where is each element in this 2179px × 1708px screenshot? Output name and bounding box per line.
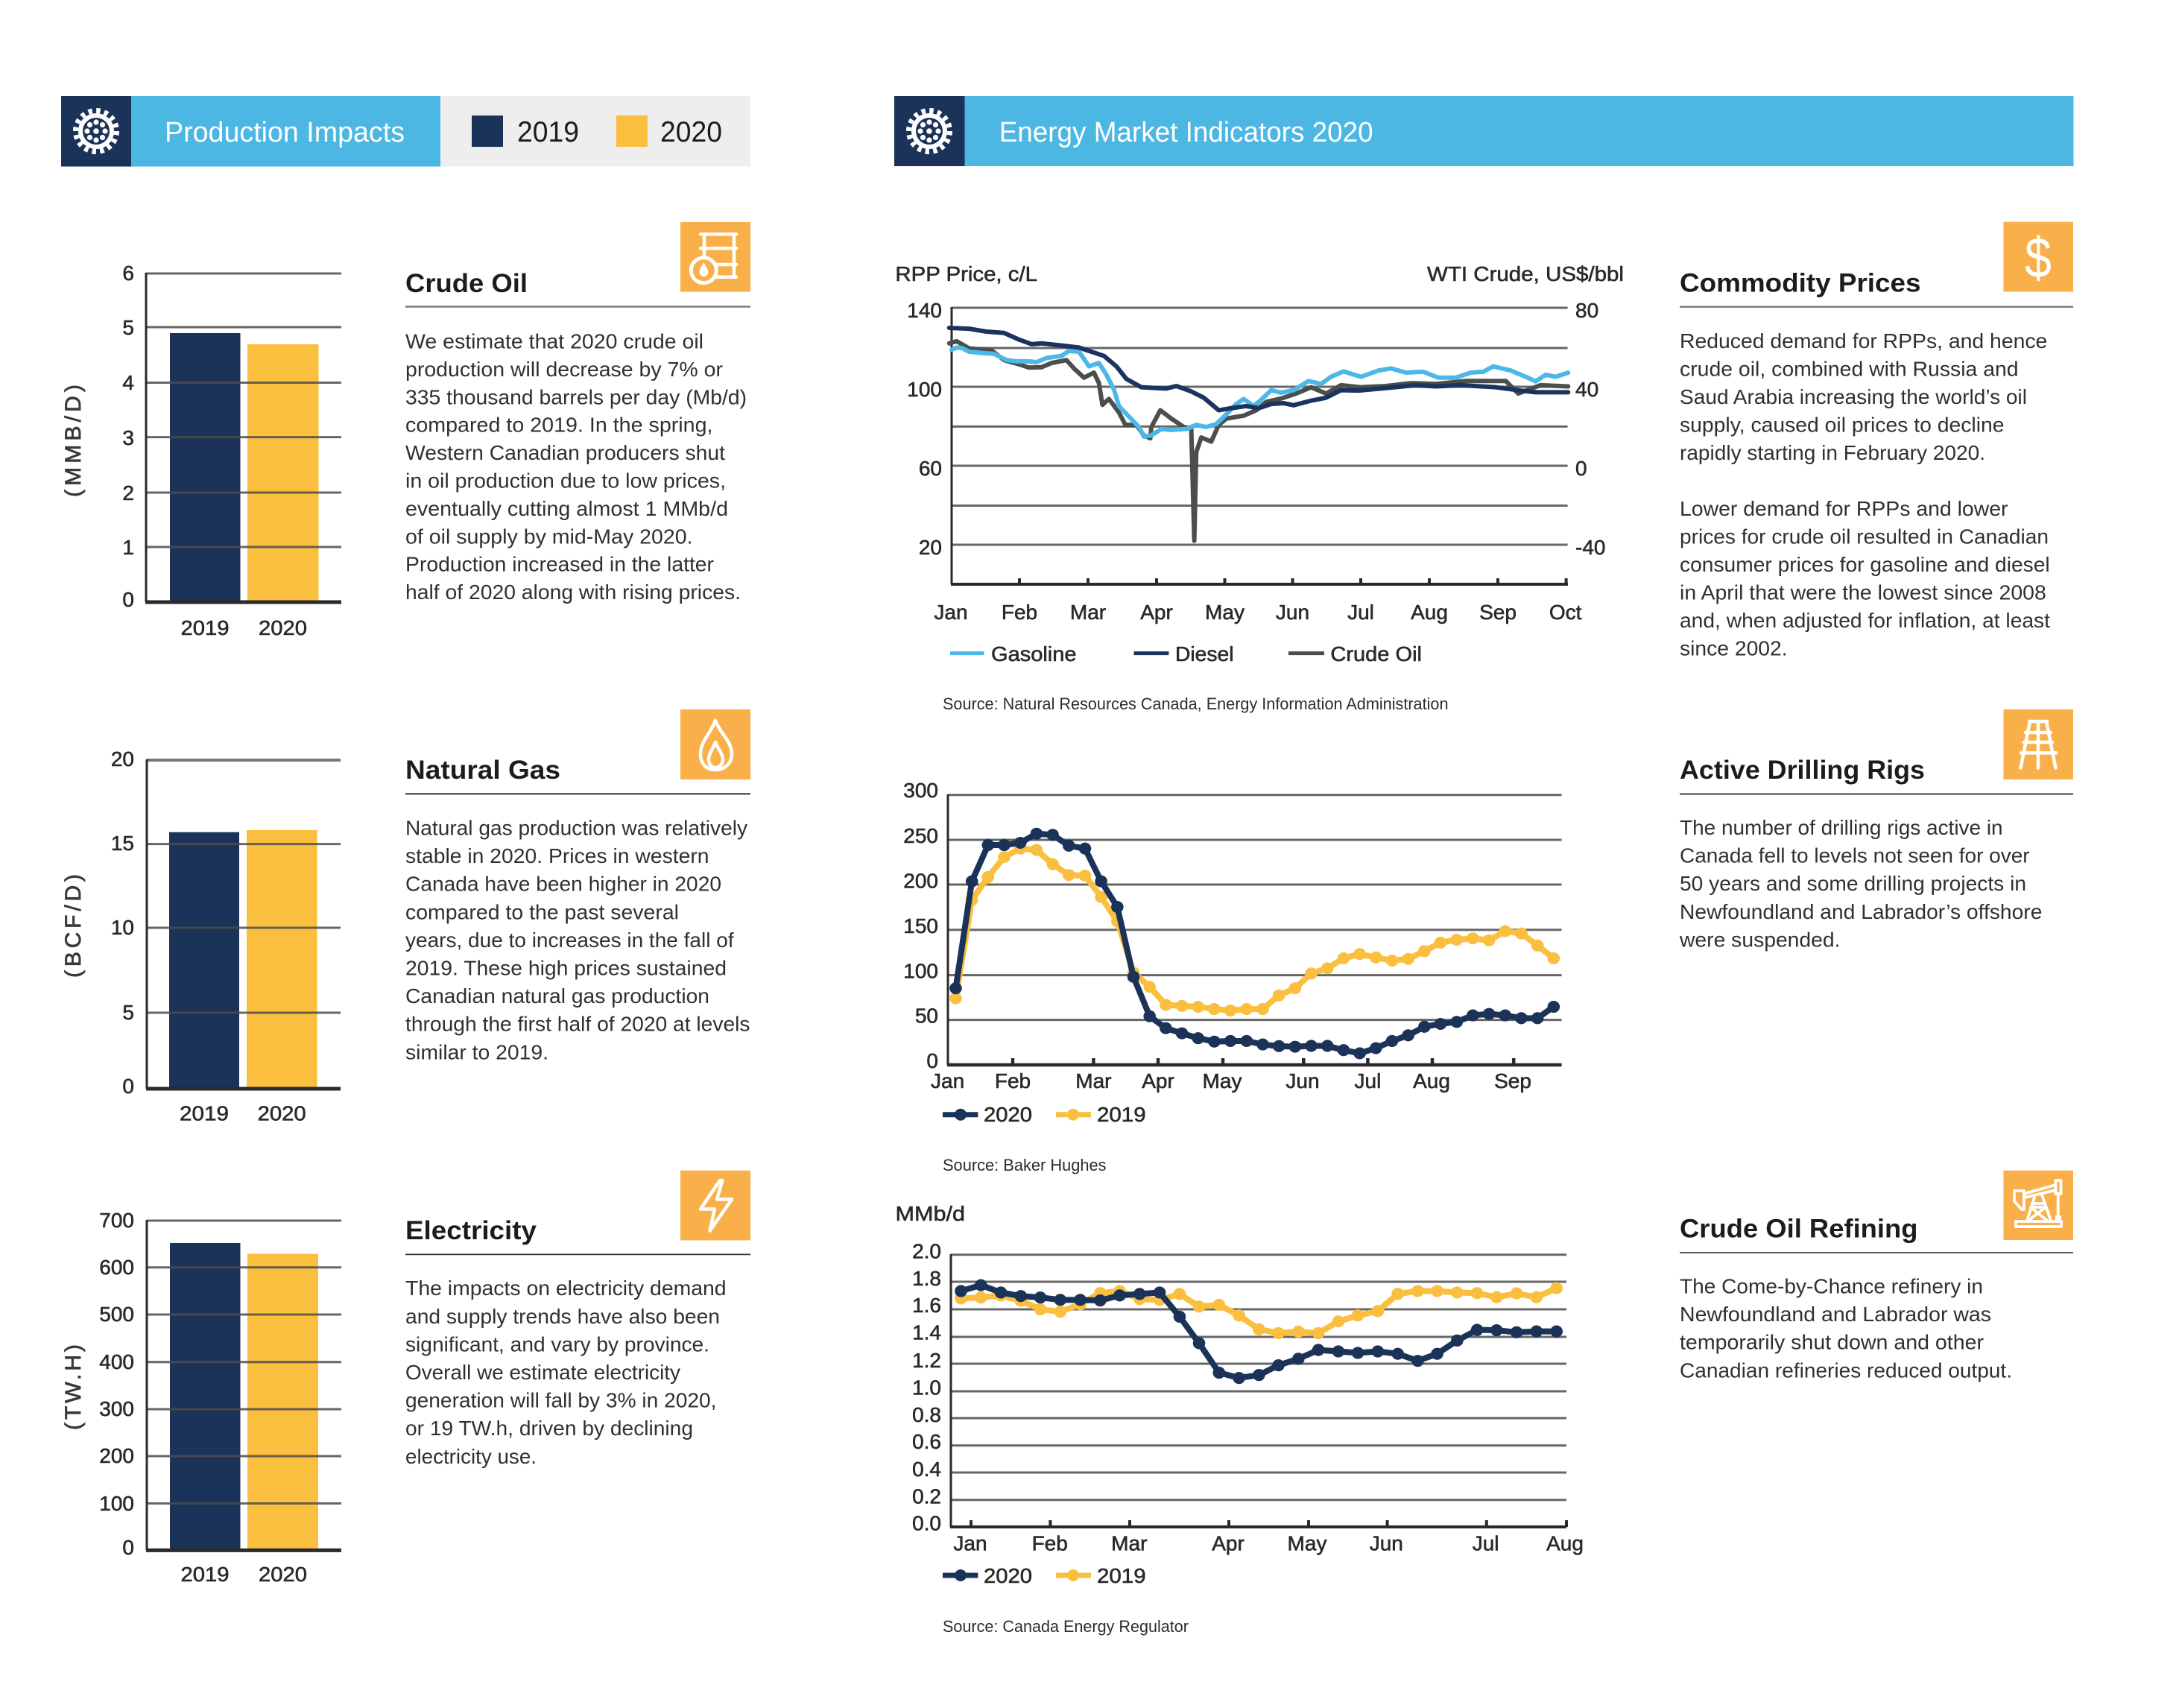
text block: crude oil: of oil supply by mid-May 2020. bbox=[405, 525, 693, 548]
line chart: commodity prices: Jun bbox=[1276, 601, 1309, 624]
text block: natural gas: Natural gas production was relatively bbox=[405, 817, 747, 839]
text block: crude oil: 335 thousand barrels per day (Mb/d) bbox=[405, 385, 747, 408]
text block: commodity prices: prices for crude oil resulted in Canadian bbox=[1680, 525, 2049, 548]
heading: natural gas: Natural Gas bbox=[405, 756, 560, 785]
line chart: active drilling rigs: Mar bbox=[1075, 1069, 1112, 1092]
legend: commodity prices: Crude Oil bbox=[1330, 642, 1422, 665]
bar chart: electricity bbox=[61, 1209, 341, 1586]
text block: active drilling rigs: The number of drilling rigs active in bbox=[1680, 816, 2003, 839]
line chart: active drilling rigs: Jun bbox=[1285, 1069, 1320, 1092]
text block: natural gas: similar to 2019. bbox=[405, 1040, 548, 1063]
text block: electricity: The impacts on electricity demand bbox=[405, 1277, 727, 1300]
line chart: crude oil refining: Feb bbox=[1032, 1531, 1068, 1554]
series: diesel bbox=[949, 328, 1568, 411]
bar chart: electricity: 100 bbox=[99, 1492, 134, 1515]
line chart: crude oil refining: 0.0 bbox=[912, 1511, 941, 1535]
text block: natural gas: Canada have been higher in 2020 bbox=[405, 873, 721, 896]
text block: commodity prices: since 2002. bbox=[1680, 636, 1788, 660]
line chart: crude oil refining: May bbox=[1288, 1531, 1326, 1554]
line chart: crude oil refining: Aug bbox=[1546, 1531, 1584, 1554]
legend: commodity prices bbox=[950, 642, 1422, 665]
bar chart: electricity: 2020 bbox=[259, 1563, 307, 1586]
text block: active drilling rigs: Newfoundland and Labrador’s offshore bbox=[1680, 900, 2042, 923]
bar chart: electricity: 600 bbox=[99, 1256, 134, 1279]
line chart: crude oil refining: 2.0 bbox=[912, 1240, 941, 1262]
line chart: crude oil refining: 1.8 bbox=[912, 1267, 941, 1290]
bar chart: electricity: 200 bbox=[99, 1444, 134, 1467]
bar chart: natural gas: (BCF/D) bbox=[61, 874, 86, 978]
text block: electricity: or 19 TW.h, driven by declining bbox=[405, 1417, 693, 1440]
text block: electricity bbox=[405, 1277, 727, 1468]
bar chart: electricity: 2019 bbox=[180, 1563, 230, 1586]
legend: commodity prices: Diesel bbox=[1175, 642, 1234, 665]
bar chart: crude oil: 2 bbox=[122, 481, 134, 505]
bar chart: electricity: 700 bbox=[99, 1209, 134, 1232]
line chart: crude oil refining: Jul bbox=[1473, 1531, 1499, 1554]
line chart: crude oil refining: Jan bbox=[953, 1531, 987, 1554]
text block: crude oil: production will decrease by 7% or bbox=[405, 358, 723, 381]
bar chart: crude oil: 2019 bbox=[180, 616, 230, 639]
text block: crude oil: We estimate that 2020 crude oil bbox=[405, 329, 703, 353]
text block: crude oil: compared to 2019. In the spring, bbox=[405, 414, 712, 437]
panel: commodity prices bbox=[1680, 222, 2073, 660]
bar chart: natural gas: 2019 bbox=[180, 1101, 229, 1125]
line chart: commodity prices: Mar bbox=[1070, 601, 1106, 624]
text block: commodity prices: Reduced demand for RPPs, and hence bbox=[1680, 329, 2047, 352]
line chart: commodity prices: 40 bbox=[1575, 378, 1598, 401]
line chart: crude oil refining: 1.4 bbox=[912, 1321, 941, 1344]
icon: flame bbox=[680, 709, 750, 779]
line chart: active drilling rigs: 100 bbox=[903, 960, 938, 982]
source note: Source: Baker Hughes bbox=[943, 1156, 1107, 1174]
line chart: commodity prices: Oct bbox=[1549, 601, 1582, 624]
series: 2019 bbox=[961, 1288, 1557, 1333]
line chart: commodity prices: 60 bbox=[919, 457, 942, 480]
icon: dollar sign bbox=[2003, 222, 2073, 292]
line chart: active drilling rigs: May bbox=[1203, 1069, 1242, 1092]
line chart: active drilling rigs: 250 bbox=[903, 824, 938, 847]
source note: Source: Canada Energy Regulator bbox=[943, 1617, 1189, 1636]
bar chart: natural gas: 0 bbox=[122, 1075, 134, 1098]
line chart: active drilling rigs: Jul bbox=[1355, 1069, 1381, 1092]
bar chart: electricity: (TW.H) bbox=[61, 1344, 86, 1430]
icon: dollar sign: $ bbox=[2025, 227, 2052, 290]
line chart: crude oil refining: 1.6 bbox=[912, 1294, 941, 1317]
line chart: commodity prices: 80 bbox=[1575, 299, 1598, 322]
icon: lightning bolt bbox=[680, 1171, 750, 1240]
line chart: crude oil refining: Jun bbox=[1370, 1531, 1403, 1554]
line chart: active drilling rigs: Feb bbox=[995, 1069, 1031, 1092]
text block: commodity prices: Lower demand for RPPs and lower bbox=[1680, 497, 2008, 520]
series: crude oil bbox=[949, 341, 1568, 541]
text block: natural gas: 2019. These high prices sustained bbox=[405, 957, 727, 979]
bar chart: electricity: 400 bbox=[99, 1350, 134, 1373]
bar chart: electricity: 0 bbox=[122, 1536, 134, 1559]
bar chart: crude oil: 3 bbox=[122, 426, 134, 449]
icon: gear bbox=[76, 110, 116, 152]
text block: crude oil refining bbox=[1680, 1274, 2012, 1382]
source note: Source: Natural Resources Canada, Energy Information Administration bbox=[943, 695, 1449, 713]
line chart: active drilling rigs: 0 bbox=[926, 1049, 938, 1072]
line chart: crude oil refining: 1.0 bbox=[912, 1376, 941, 1399]
text block: active drilling rigs: were suspended. bbox=[1679, 928, 1841, 951]
legend: rigs: 2019 bbox=[1097, 1103, 1146, 1126]
legend: refining: 2019 bbox=[1097, 1564, 1146, 1587]
line chart: crude oil refining: MMb/d bbox=[896, 1202, 965, 1225]
line chart: active drilling rigs: Jan bbox=[931, 1069, 964, 1092]
line chart: active drilling rigs bbox=[903, 779, 1562, 1174]
bar chart: crude oil: 5 bbox=[122, 316, 134, 339]
text block: natural gas: through the first half of 2020 at levels bbox=[405, 1013, 750, 1036]
text block: electricity: significant, and vary by province. bbox=[405, 1332, 709, 1356]
text block: crude oil refining: temporarily shut down and other bbox=[1680, 1331, 1984, 1354]
line chart: commodity prices: 0 bbox=[1575, 457, 1587, 480]
text block: commodity prices: rapidly starting in February 2020. bbox=[1680, 441, 1985, 464]
bar chart: natural gas: 5 bbox=[122, 1001, 134, 1024]
text block: natural gas: compared to the past several bbox=[405, 900, 679, 923]
line chart: active drilling rigs: Sep bbox=[1494, 1069, 1531, 1092]
text block: crude oil bbox=[405, 329, 747, 604]
line chart: crude oil refining: 0.6 bbox=[912, 1430, 941, 1453]
line chart: commodity prices: Aug bbox=[1411, 601, 1448, 624]
text block: electricity: Overall we estimate electricity bbox=[405, 1361, 680, 1384]
line chart: active drilling rigs: Apr bbox=[1142, 1069, 1174, 1092]
bar chart: natural gas bbox=[61, 747, 341, 1125]
bar chart: crude oil: 2020 bbox=[259, 616, 307, 639]
line chart: commodity prices: 140 bbox=[907, 299, 942, 322]
heading: crude oil refining: Crude Oil Refining bbox=[1680, 1215, 1918, 1243]
text block: crude oil refining: The Come-by-Chance refinery in bbox=[1680, 1274, 1983, 1298]
legend: rigs: 2020 bbox=[984, 1103, 1032, 1126]
bar chart: crude oil: 0 bbox=[122, 588, 134, 611]
icon: pump jack bbox=[2003, 1171, 2073, 1240]
line chart: crude oil refining: 0.8 bbox=[912, 1403, 941, 1426]
text block: commodity prices bbox=[1680, 329, 2050, 660]
line chart: commodity prices: WTI Crude, US$/bbl bbox=[1427, 262, 1624, 285]
text block: crude oil: half of 2020 along with rising prices. bbox=[405, 581, 741, 604]
line chart: commodity prices bbox=[895, 262, 1624, 713]
heading: production impacts: Production Impacts bbox=[165, 117, 405, 148]
line chart: active drilling rigs: Aug bbox=[1413, 1069, 1450, 1092]
line chart: crude oil refining bbox=[896, 1202, 1584, 1636]
panel: electricity production bbox=[61, 1171, 750, 1586]
text block: crude oil: Western Canadian producers shut bbox=[405, 441, 725, 464]
series: 2020 bbox=[961, 1285, 1557, 1378]
bar chart: crude oil: 4 bbox=[122, 371, 134, 394]
icon: drilling rig bbox=[2003, 709, 2073, 779]
bar chart: natural gas: 20 bbox=[111, 747, 134, 771]
panel: crude oil refining bbox=[1680, 1171, 2073, 1382]
line chart: commodity prices: 100 bbox=[907, 378, 942, 401]
series: 2020 bbox=[955, 834, 1554, 1053]
text block: commodity prices: supply, caused oil prices to decline bbox=[1680, 413, 2005, 437]
line chart: active drilling rigs: 300 bbox=[903, 779, 938, 802]
legend: refining: 2020 bbox=[984, 1564, 1032, 1587]
text block: commodity prices: in April that were the lowest since 2008 bbox=[1680, 581, 2046, 604]
line chart: crude oil refining: 0.2 bbox=[912, 1485, 941, 1508]
line chart: commodity prices: RPP Price, c/L bbox=[895, 262, 1037, 285]
text block: electricity: and supply trends have also been bbox=[405, 1305, 720, 1328]
panel: natural gas production bbox=[61, 709, 750, 1125]
legend: commodity prices: Gasoline bbox=[991, 642, 1076, 665]
text block: crude oil refining: Newfoundland and Labrador was bbox=[1680, 1303, 1991, 1326]
legend: refining bbox=[943, 1564, 1146, 1587]
bar chart: crude oil bbox=[61, 262, 341, 639]
text block: natural gas: Canadian natural gas production bbox=[405, 984, 709, 1008]
line chart: active drilling rigs: 50 bbox=[915, 1005, 938, 1027]
line chart: commodity prices: Sep bbox=[1479, 601, 1517, 624]
icon: gear bbox=[909, 110, 949, 152]
text block: commodity prices: Saud Arabia increasing the world’s oil bbox=[1680, 385, 2027, 408]
line chart: commodity prices: -40 bbox=[1575, 536, 1605, 559]
text block: natural gas bbox=[405, 817, 750, 1063]
legend: years: 2019 bbox=[517, 116, 579, 148]
legend: years bbox=[472, 116, 722, 148]
text block: active drilling rigs: 50 years and some drilling projects in bbox=[1680, 872, 2026, 895]
line chart: commodity prices: Apr bbox=[1140, 601, 1173, 624]
series: 2019 bbox=[955, 849, 1554, 1010]
bar chart: electricity: 500 bbox=[99, 1303, 134, 1326]
line chart: commodity prices: Jan bbox=[934, 601, 968, 624]
line chart: commodity prices: Feb bbox=[1002, 601, 1037, 624]
bar chart: natural gas: 10 bbox=[111, 916, 134, 939]
line chart: commodity prices: Jul bbox=[1347, 601, 1374, 624]
text block: crude oil refining: Canadian refineries reduced output. bbox=[1680, 1359, 2012, 1382]
text block: crude oil: eventually cutting almost 1 MMb/d bbox=[405, 497, 728, 520]
line chart: commodity prices: May bbox=[1205, 601, 1245, 624]
line chart: active drilling rigs: 150 bbox=[903, 914, 938, 937]
bar chart: natural gas: 2020 bbox=[258, 1101, 306, 1125]
heading: commodity prices: Commodity Prices bbox=[1680, 268, 1921, 298]
legend: rigs bbox=[943, 1103, 1146, 1126]
line chart: crude oil refining: Apr bbox=[1212, 1531, 1245, 1554]
bar chart: crude oil: 1 bbox=[122, 536, 134, 559]
header: energy market indicators bbox=[894, 96, 2073, 166]
heading: active drilling rigs: Active Drilling Rigs bbox=[1680, 756, 1925, 785]
text block: electricity: generation will fall by 3% in 2020, bbox=[405, 1389, 717, 1412]
heading: energy market indicators: Energy Market Indicators 2020 bbox=[999, 117, 1373, 148]
legend: years: 2020 bbox=[660, 116, 722, 148]
header: production impacts bbox=[61, 96, 750, 167]
text block: crude oil: in oil production due to low prices, bbox=[405, 469, 726, 492]
text block: crude oil: Production increased in the latter bbox=[405, 553, 714, 576]
text block: commodity prices: crude oil, combined with Russia and bbox=[1680, 358, 2019, 380]
series: gasoline bbox=[952, 347, 1568, 437]
text block: commodity prices: and, when adjusted for inflation, at least bbox=[1680, 609, 2050, 632]
heading: crude oil: Crude Oil bbox=[405, 269, 528, 298]
heading: electricity: Electricity bbox=[405, 1216, 537, 1245]
bar chart: crude oil: (MMB/D) bbox=[61, 385, 86, 497]
bar chart: crude oil: 6 bbox=[122, 262, 134, 285]
text block: active drilling rigs: Canada fell to levels not seen for over bbox=[1680, 844, 2030, 867]
panel: active drilling rigs bbox=[1679, 709, 2073, 951]
text block: natural gas: stable in 2020. Prices in western bbox=[405, 844, 709, 867]
icon: oil barrel bbox=[680, 222, 750, 292]
text block: electricity: electricity use. bbox=[405, 1445, 537, 1468]
text block: commodity prices: consumer prices for gasoline and diesel bbox=[1680, 553, 2050, 576]
bar chart: electricity: 300 bbox=[99, 1397, 134, 1420]
text block: active drilling rigs bbox=[1679, 816, 2042, 951]
line chart: commodity prices: 20 bbox=[919, 536, 942, 559]
line chart: crude oil refining: 1.2 bbox=[912, 1349, 941, 1372]
line chart: active drilling rigs: 200 bbox=[903, 869, 938, 893]
text block: natural gas: years, due to increases in the fall of bbox=[405, 929, 734, 952]
line chart: crude oil refining: 0.4 bbox=[912, 1458, 941, 1481]
panel: crude oil production bbox=[61, 222, 750, 639]
bar chart: natural gas: 15 bbox=[111, 832, 134, 855]
line chart: crude oil refining: Mar bbox=[1111, 1531, 1147, 1554]
